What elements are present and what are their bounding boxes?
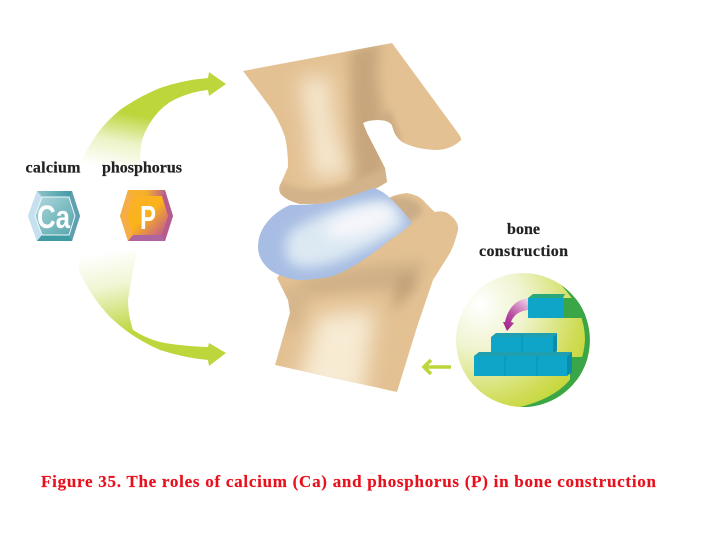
arrow: upper curved green arrow bbox=[80, 72, 226, 165]
cartilage disc bbox=[258, 188, 412, 280]
purple curved arrow bbox=[503, 298, 529, 331]
label: bone construction bbox=[479, 221, 568, 260]
label: bone construction: construction bbox=[479, 243, 568, 260]
icon: calcium hexagon bbox=[28, 191, 80, 241]
green crescent bbox=[520, 285, 590, 407]
icon: calcium hexagon: Ca bbox=[37, 199, 70, 235]
icon: phosphorus hexagon bbox=[120, 190, 173, 241]
caption: Figure 35. The roles of calcium (Ca) and phosphorus (P) in bone construction bbox=[41, 472, 657, 491]
label: phosphorus: phosphorus bbox=[102, 160, 182, 176]
green block shadows bbox=[563, 298, 588, 380]
upper bone bbox=[243, 43, 462, 204]
arrow: lower curved green arrow bbox=[77, 252, 226, 366]
icon: phosphorus hexagon: P bbox=[140, 199, 156, 236]
bottom row blocks bbox=[474, 352, 572, 376]
icon: bone construction disc bbox=[456, 273, 595, 407]
label: bone construction: bone bbox=[507, 221, 540, 238]
second row blocks bbox=[491, 333, 557, 355]
top loose block bbox=[528, 294, 565, 318]
arrow: small green left arrow bbox=[424, 360, 451, 374]
label: calcium: calcium bbox=[26, 160, 81, 176]
lower bone bbox=[275, 193, 458, 392]
